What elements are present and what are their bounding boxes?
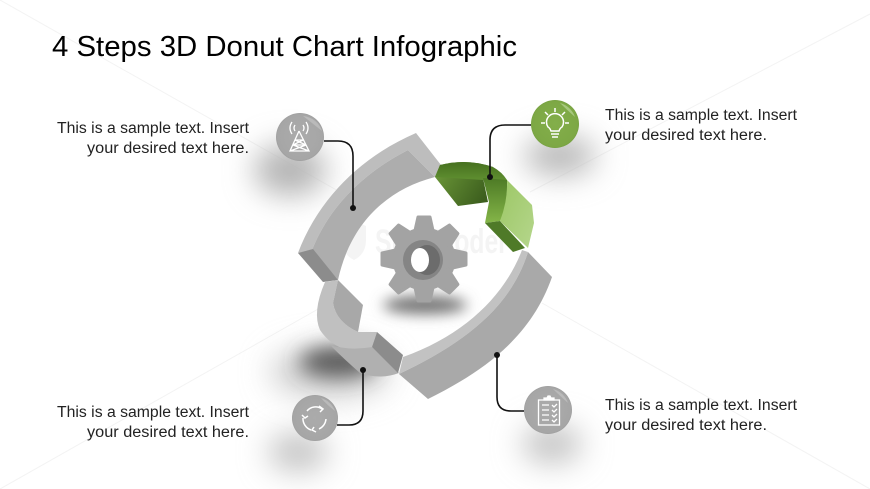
watermark: SlideModel: [375, 223, 505, 261]
text block: top left: your desired text here.: [87, 140, 249, 157]
icon: clipboard checklist: [524, 386, 572, 434]
text block: top left: This is a sample text. Insert: [57, 120, 250, 137]
text block: bottom left: This is a sample text. Insert: [57, 404, 250, 421]
text block: top right: your desired text here.: [605, 127, 767, 144]
shadows: [254, 136, 596, 472]
connector: bottom right: [494, 352, 524, 411]
text block: bottom right: This is a sample text. Insert: [605, 397, 798, 414]
connector: top left: [324, 141, 356, 211]
icon: light bulb: [531, 100, 579, 148]
donut segment: top right green: [435, 162, 534, 252]
text block: bottom right: your desired text here.: [605, 417, 767, 434]
gear icon: [382, 217, 466, 301]
donut segment: top left gray: [298, 133, 441, 282]
text block: bottom left: your desired text here.: [87, 424, 249, 441]
text block: top right: [605, 107, 798, 144]
title: 4 Steps 3D Donut Chart Infographic: [52, 31, 517, 63]
text block: top left: [57, 120, 250, 157]
text block: top right: This is a sample text. Insert: [605, 107, 798, 124]
donut segment: bottom right gray: [399, 250, 552, 399]
donut segment: bottom left gray: [317, 280, 403, 376]
connector: bottom left: [337, 367, 366, 425]
text block: bottom left: [57, 404, 250, 441]
watermark: [342, 223, 505, 261]
icon: antenna tower: [276, 113, 324, 161]
text block: bottom right: [605, 397, 798, 434]
icon: cycle arrows: [292, 395, 338, 441]
connector: top right: [487, 125, 531, 180]
